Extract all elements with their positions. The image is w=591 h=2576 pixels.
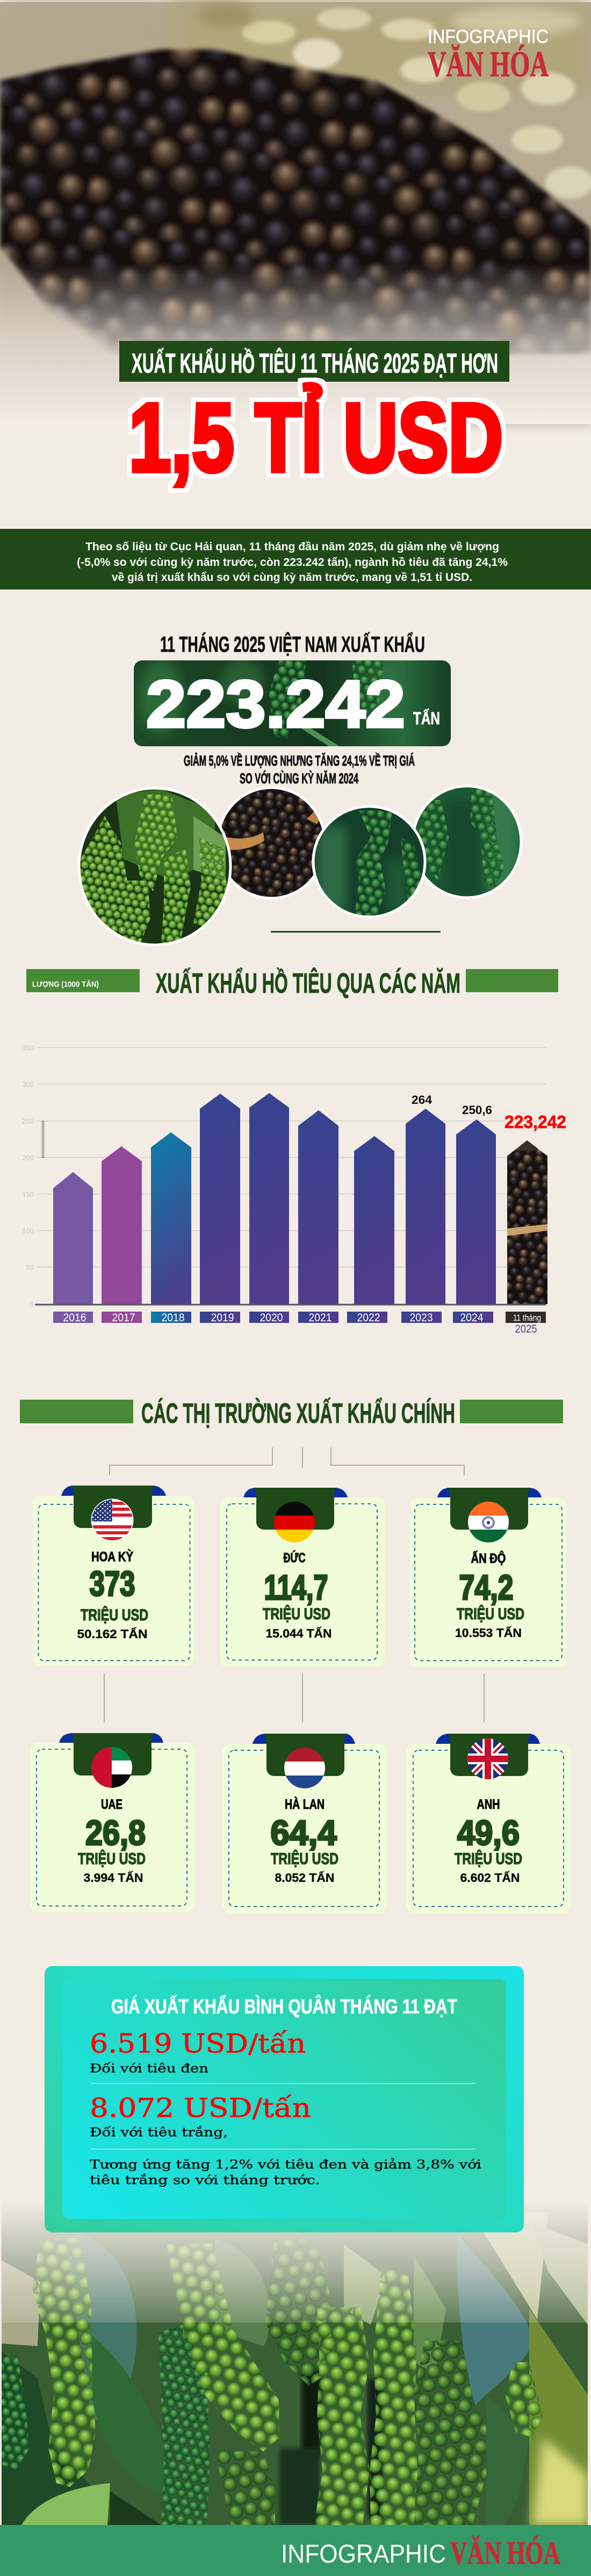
flag: India (468, 1502, 509, 1542)
bar 2023 (406, 1109, 445, 1304)
chart unit label: LƯỢNG (1000 TẤN) (32, 980, 99, 989)
bar 2017 (102, 1146, 142, 1304)
bar chart: 150 (22, 1190, 34, 1198)
connector lines (104, 1447, 484, 1722)
card: Ấn Độ: 74,2 (459, 1568, 514, 1607)
bar chart: 50 (26, 1263, 34, 1271)
card: Đức: 114,7 (264, 1568, 328, 1607)
bar 2019 (200, 1094, 240, 1304)
card: UAE: TRIỆU USD (78, 1850, 146, 1868)
card: Anh: 49,6 (457, 1813, 520, 1852)
card: Hoa Kỳ: 50.162 TẤN (77, 1627, 147, 1641)
bar 2018 (151, 1132, 191, 1304)
card: Ấn Độ: ẤN ĐỘ (471, 1550, 506, 1566)
card: UAE: UAE (101, 1797, 122, 1812)
volume pill with green pepper photo: 223.242 (146, 667, 405, 741)
flag: UK (467, 1738, 508, 1779)
bar chart: 350 (22, 1044, 34, 1052)
bar chart: 250 (22, 1117, 34, 1125)
x axis (35, 1304, 546, 1306)
year labels: 2019 (211, 1312, 234, 1324)
card: Hoa Kỳ: TRIỆU USD (81, 1606, 148, 1624)
card: Anh: TRIỆU USD (455, 1850, 522, 1868)
card: Đức: ĐỨC (284, 1549, 305, 1566)
card: Ấn Độ: TRIỆU USD (457, 1605, 524, 1623)
divider line under photos (271, 931, 441, 933)
bar 2020 (249, 1093, 289, 1304)
year labels: 2018 (161, 1312, 185, 1324)
price: white pepper: Đối với tiêu trắng, (90, 2126, 228, 2140)
bar chart: 0 (30, 1300, 33, 1308)
card: Đức: TRIỆU USD (263, 1605, 330, 1623)
oval photo: black pepper (218, 788, 326, 898)
flag: Netherlands (284, 1748, 325, 1788)
card: Anh: 6.602 TẤN (460, 1871, 520, 1884)
bar 2022 (354, 1136, 394, 1304)
card: Hà Lan: HÀ LAN (285, 1796, 325, 1812)
card: Ấn Độ (410, 1488, 566, 1668)
year labels: 2022 (357, 1312, 380, 1324)
footer logo bar (0, 2525, 591, 2576)
bar 2021 (298, 1110, 338, 1304)
card: UAE (30, 1733, 194, 1912)
value label 2025: 223,242 (504, 1112, 566, 1132)
year labels: 2016 (63, 1312, 86, 1324)
export volume heading: 11 THÁNG 2025 VIỆT NAM XUẤT KHẨU (160, 631, 425, 657)
card: Hà Lan: 8.052 TẤN (275, 1871, 334, 1884)
year labels: 2024 (460, 1312, 484, 1324)
oval photo: green pepper 3 (313, 806, 425, 917)
logo top: INFOGRAPHIC (428, 26, 549, 47)
year labels: 2020 (260, 1312, 283, 1324)
logo top (428, 26, 549, 84)
cluster 3 (266, 2239, 370, 2525)
volume change note: GIẢM 5,0% VỀ LƯỢNG NHƯNG TĂNG 24,1% VỀ TRỊ GIÁ (184, 752, 415, 769)
summary band: Theo số liệu từ Cục Hải quan, 11 tháng đầu năm 2025, dù giảm nhẹ về lượng (85, 541, 499, 553)
card: Anh (406, 1734, 571, 1913)
chart heading right bar (466, 969, 558, 992)
year labels: 2021 (308, 1312, 332, 1324)
card: Hoa Kỳ: HOA KỲ (91, 1548, 133, 1564)
chart section header (26, 967, 558, 999)
value label 2023: 264 (412, 1093, 433, 1107)
flag: USA (91, 1499, 133, 1541)
cluster far left (2, 2354, 30, 2470)
card: Hà Lan (222, 1734, 387, 1913)
card: Đức (220, 1488, 385, 1667)
card: Đức: 15.044 TẤN (265, 1627, 332, 1640)
value label 2024: 250,6 (462, 1103, 492, 1117)
cluster 1 (32, 2238, 96, 2487)
price: white pepper: 8.072 USD/tấn (90, 2093, 311, 2123)
flag: UAE (91, 1747, 132, 1788)
year labels: 2023 (409, 1312, 433, 1324)
cluster 2 (158, 2244, 279, 2525)
card: Anh: ANH (477, 1797, 500, 1812)
bar 2016 (53, 1172, 93, 1304)
bar 2024 (456, 1119, 496, 1304)
summary band: về giá trị xuất khẩu so với cùng kỳ năm trước, mang về 1,51 tỉ USD. (112, 571, 472, 584)
year labels (53, 1312, 546, 1335)
card: UAE: 26,8 (85, 1813, 146, 1852)
bottom photo: green pepper vines (2, 2201, 588, 2525)
bar chart (22, 1044, 566, 1335)
price change note: tiêu trắng so với tháng trước. (90, 2173, 320, 2187)
cluster 5 (414, 2341, 486, 2525)
panel: average export price: GIÁ XUẤT KHẨU BÌNH QUÂN THÁNG 11 ĐẠT (111, 1994, 457, 2018)
price: black pepper: 6.519 USD/tấn (90, 2028, 306, 2059)
footer logo bar: INFOGRAPHIC (281, 2540, 446, 2568)
year labels: 2017 (112, 1312, 135, 1324)
volume change note: SO VỚI CÙNG KỲ NĂM 2024 (240, 770, 358, 787)
card: Hà Lan: 64,4 (271, 1813, 336, 1852)
oval photo: green pepper 4 (413, 786, 521, 898)
cluster 4 (370, 2266, 418, 2525)
chart unit label (26, 969, 140, 992)
title bar (119, 341, 509, 382)
price: black pepper (90, 2028, 306, 2076)
hero photo: black pepper in a sack (0, 0, 591, 424)
bar chart: 200 (22, 1154, 34, 1162)
year labels: 11 tháng (513, 1313, 541, 1323)
card: UAE: 3.994 TẤN (84, 1871, 143, 1884)
summary band (0, 529, 591, 590)
card: Ấn Độ: 10.553 TẤN (455, 1626, 522, 1640)
oval photo: green pepper 1 (78, 788, 230, 945)
price: white pepper (90, 2093, 311, 2140)
year labels: 2025 (515, 1323, 537, 1335)
price change note (90, 2158, 481, 2187)
flag: Germany (274, 1502, 315, 1542)
bar chart: 300 (22, 1080, 34, 1088)
price change note: Tương ứng tăng 1,2% với tiêu đen và giảm 3,8% với (90, 2158, 481, 2172)
bar 2025 black pepper (507, 1140, 547, 1304)
bar chart: 100 (22, 1227, 34, 1235)
volume pill with green pepper photo (134, 655, 451, 749)
volume pill with green pepper photo: TẤN (413, 709, 440, 728)
left strip (0, 2201, 2, 2525)
cluster 6 (505, 2362, 543, 2437)
summary band: (-5,0% so với cùng kỳ năm trước, còn 223.242 tấn), ngành hồ tiêu đã tăng 24,1% (77, 556, 508, 569)
volume change note (184, 752, 415, 787)
card: Hoa Kỳ (33, 1486, 194, 1666)
card: Hoa Kỳ: 373 (89, 1564, 135, 1603)
card: Hà Lan: TRIỆU USD (271, 1850, 338, 1868)
panel: average export price (45, 1966, 524, 2232)
price: black pepper: Đối với tiêu đen (90, 2062, 208, 2076)
